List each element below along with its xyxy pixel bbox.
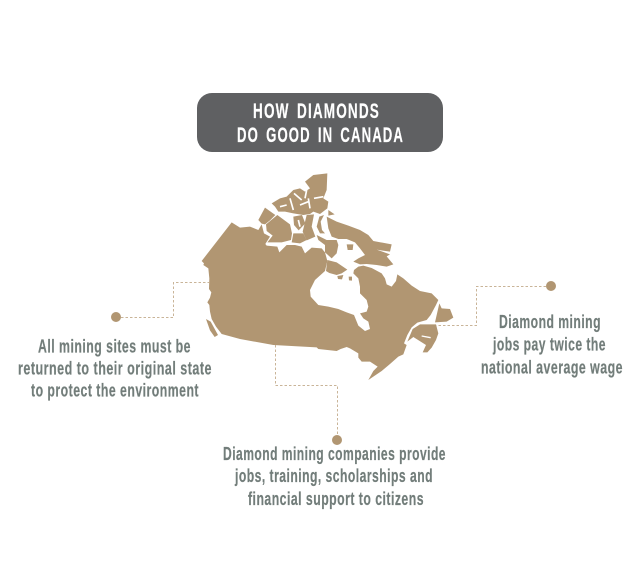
text: environment: returned to their original state: [18, 358, 212, 378]
text: wages: [481, 312, 623, 378]
text: environment: to protect the environment: [31, 380, 199, 400]
map of Canada: [202, 173, 453, 380]
connector: bottom: [276, 345, 338, 435]
dot: bottom: [332, 435, 342, 445]
text: jobs and support: Diamond mining companies provide: [223, 444, 446, 464]
title banner: [197, 93, 443, 152]
title banner: DO GOOD IN CANADA: [237, 123, 404, 147]
text: jobs and support: jobs, training, scholarships and: [234, 466, 433, 486]
connector: right: [436, 286, 546, 326]
connector: left: [121, 282, 209, 318]
text: environment: All mining sites must be: [38, 336, 191, 356]
dot: right: [546, 281, 556, 291]
text: jobs and support: [223, 444, 446, 509]
title banner: HOW DIAMONDS: [253, 99, 380, 123]
dot: left: [111, 312, 121, 322]
text: environment: [18, 336, 212, 400]
text: jobs and support: financial support to citizens: [248, 489, 424, 509]
